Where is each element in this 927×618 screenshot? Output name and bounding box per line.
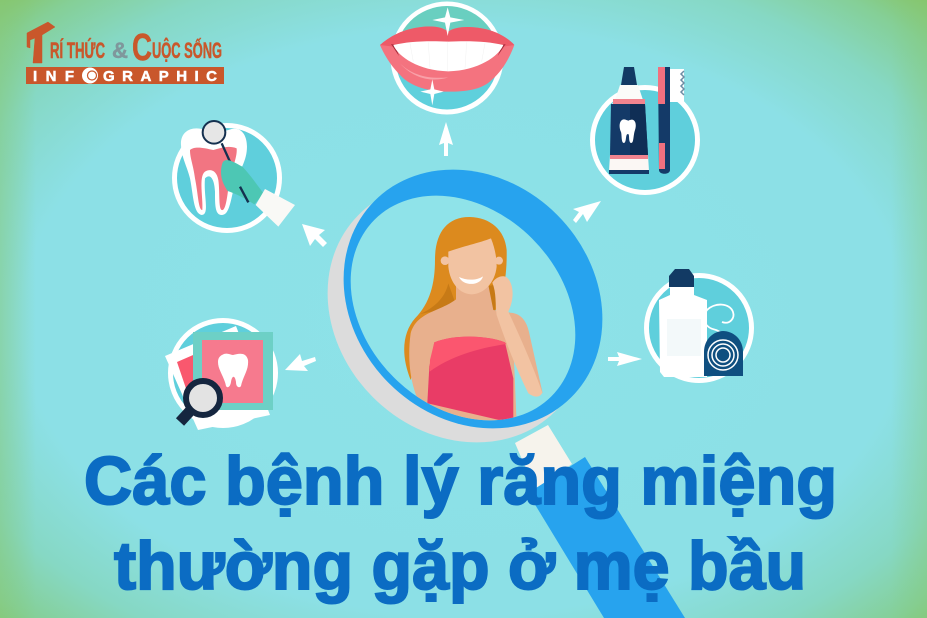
lip highlight [400,63,448,80]
icon: smile [380,4,514,112]
brush head pink [658,67,665,104]
arrow to mouthwash [608,352,642,366]
ear right [495,257,503,265]
magnifier blue ring [291,117,655,481]
icon: tooth inspection [174,121,295,230]
glove [221,160,264,204]
icon: toothpaste and brush [592,67,698,192]
tube cap [621,67,637,85]
logo: brand name: UỘC SỐNG [152,37,222,63]
arrow to tooth [302,224,327,247]
instrument tip [240,187,248,202]
tube body [610,104,648,155]
tube pink band [613,99,645,104]
ear left [441,256,449,265]
dress highlight [430,337,506,372]
bottle [659,287,707,377]
tooth lines [410,42,485,71]
logo: brand name: C [132,27,152,69]
logo: infographic banner: INF [33,68,74,85]
arrows [285,122,642,371]
film tooth [218,354,248,387]
arrow to toothpaste [573,201,601,223]
logo: brand name: & [112,38,128,63]
title line 2: thường gặp ở mẹ bầu [114,528,806,604]
magnifier lens [305,150,621,466]
floss spool rings [708,340,738,370]
magnifying glass [275,117,685,618]
tooth [181,128,247,215]
magnifier handle: blue grip [528,457,685,618]
logo: brand name [27,22,222,69]
tube shoulder [611,85,645,106]
arrow up to smile [439,122,453,156]
logo: infographic banner: GRAPHIC [103,68,217,85]
magnifier handle: white collar [515,425,572,490]
front film pink [202,340,263,403]
icon: dental x-ray [165,320,276,430]
logo: infographic banner [26,67,224,85]
dental mirror [203,121,248,202]
back film [165,326,270,430]
tube label tooth [620,119,636,143]
dress [427,337,513,423]
sparkle top [432,7,464,36]
mouthwash circle [646,276,752,380]
front film [193,332,273,410]
teeth [393,41,503,71]
logo: brand name: RÍ THỨC [50,38,105,63]
woman in lens [404,217,543,423]
body [409,285,517,423]
tube body shade [630,104,648,155]
magnifier icon [180,381,220,422]
upper arm [507,313,543,393]
logo [26,22,224,85]
face [448,238,497,294]
hair shadow [420,283,500,314]
lips [380,27,514,92]
back film pink [177,352,210,415]
brush grip pink [659,143,665,169]
smile circle upper tint [402,6,492,32]
toothpaste circle [592,88,698,192]
magnifier grey rim [275,131,639,495]
brush handle [658,67,670,174]
mouth corners [391,44,506,56]
tube bottom [609,155,649,171]
hair back [404,217,507,380]
bristles [670,69,684,102]
xray circle [170,320,276,426]
tube crimp [609,170,649,174]
sparkle bottom [420,79,444,105]
arm and hand [492,276,542,397]
smile [459,276,483,284]
upper lip [380,27,514,47]
title [84,443,837,604]
sleeve [256,189,295,227]
bottle cap [669,269,694,287]
floss box [704,331,743,376]
tube bottom band [610,155,648,159]
icon: mouthwash and floss [646,269,752,380]
tooth pulp [190,147,237,210]
title line 1: Các bệnh lý răng miệng [84,443,837,519]
tooth icon circle [174,126,280,230]
floss string [704,305,733,342]
smile circle [393,4,501,112]
arrow to x-ray [285,354,316,371]
bottle label [667,319,701,356]
